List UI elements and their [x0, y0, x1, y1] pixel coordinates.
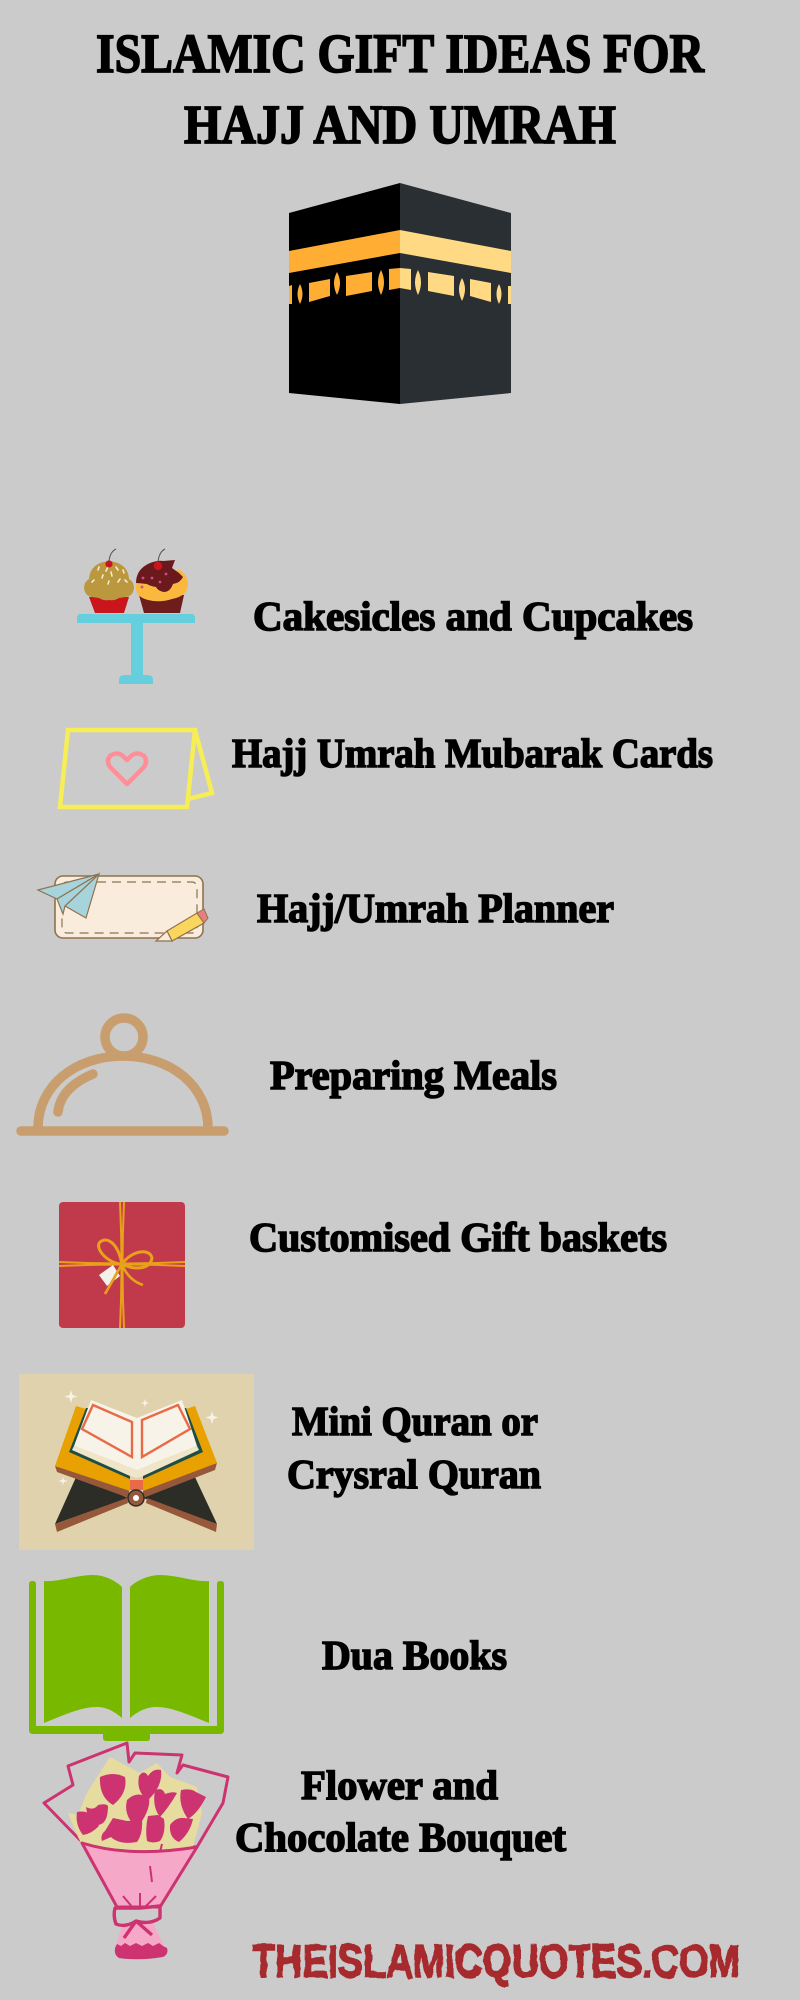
icon: green open book: [29, 1575, 224, 1741]
label: flower and chocolate bouquet: [235, 1762, 566, 1860]
icon: gift box: [59, 1202, 185, 1328]
label: customised gift baskets: Customised Gift baskets: [249, 1214, 667, 1260]
icon: kaaba: [289, 183, 511, 404]
label: dua books: Dua Books: [322, 1632, 507, 1678]
icon: food cloche: [21, 1018, 224, 1131]
title: ISLAMIC GIFT IDEAS FOR: [96, 23, 705, 84]
icon: flower bouquet: [44, 1743, 228, 1959]
title: [96, 23, 705, 155]
icon: quran on a stand: [19, 1374, 254, 1550]
label: flower and chocolate bouquet: Chocolate Bouquet: [235, 1814, 566, 1860]
label: mini quran or crystal quran: Mini Quran or: [292, 1398, 538, 1444]
title: HAJJ AND UMRAH: [184, 94, 616, 155]
label: hajj umrah mubarak cards: Hajj Umrah Mubarak Cards: [232, 730, 713, 776]
label: hajj/umrah planner: Hajj/Umrah Planner: [257, 885, 614, 931]
label: flower and chocolate bouquet: Flower and: [301, 1762, 498, 1808]
label: mini quran or crystal quran: [287, 1398, 541, 1497]
label: mini quran or crystal quran: Crysral Quran: [287, 1451, 541, 1497]
icon: greeting card: [60, 730, 212, 807]
label: preparing meals: Preparing Meals: [270, 1052, 557, 1098]
icon: cupcakes on a stand: [77, 549, 195, 684]
icon: planner with paper plane and pencil: [38, 874, 208, 941]
label: cakesicles and cupcakes: Cakesicles and Cupcakes: [253, 593, 693, 639]
